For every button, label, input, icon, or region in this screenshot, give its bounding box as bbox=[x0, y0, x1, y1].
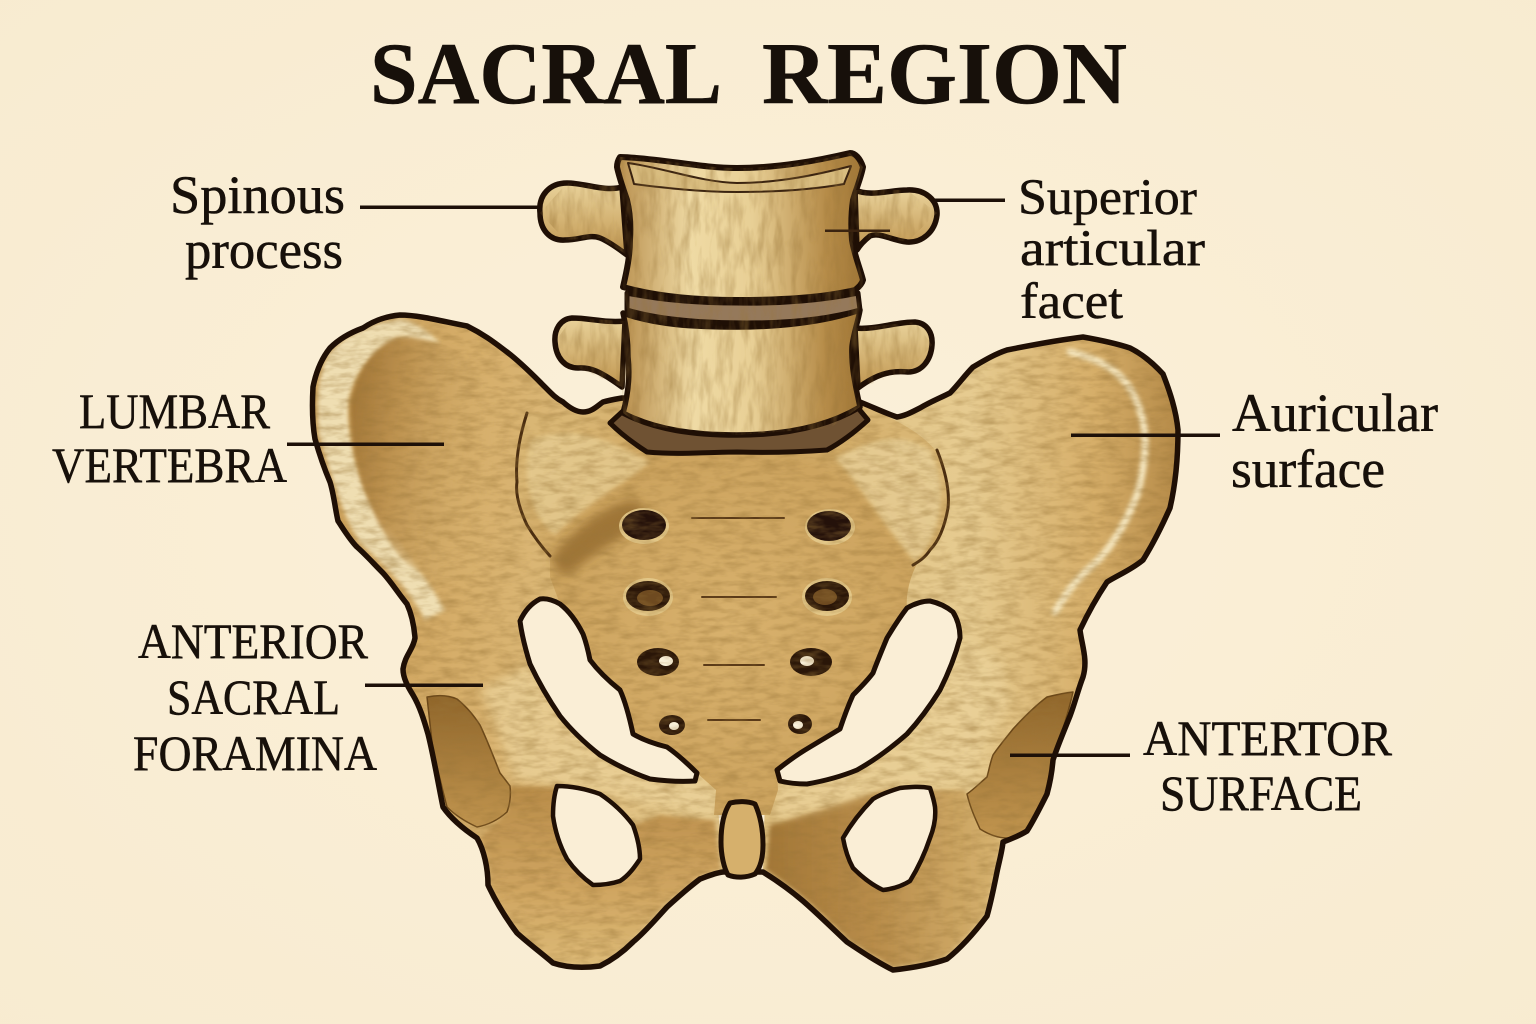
left iliac crest rim bbox=[318, 319, 445, 620]
label: Superior articular facet: facet bbox=[1020, 274, 1123, 330]
title bbox=[370, 26, 1127, 123]
label: Spinous process: Spinous bbox=[170, 165, 345, 225]
left large pelvic opening bbox=[520, 599, 697, 781]
label: Auricular surface bbox=[1071, 383, 1438, 499]
label: Anterior sacral foramina: ANTERIOR bbox=[138, 613, 369, 669]
left iliac fossa bbox=[350, 337, 515, 582]
label: Anterior sacral foramina: FORAMINA bbox=[133, 725, 377, 781]
label: Lumbar vertebra: VERTEBRA bbox=[52, 437, 287, 493]
lower vertebra transverse processes bbox=[555, 318, 932, 388]
right pubic hole bbox=[843, 787, 935, 890]
right large pelvic opening bbox=[777, 601, 960, 784]
right iliac crest highlight bbox=[1055, 352, 1145, 612]
left lower ring bbox=[480, 786, 721, 964]
left wing highlight bbox=[527, 433, 650, 535]
left wing shadow bbox=[552, 500, 646, 574]
label: Lumbar vertebra: LUMBAR bbox=[79, 383, 271, 439]
pelvis outline bbox=[312, 315, 1178, 970]
illustration: pelvis and lumbar vertebrae bbox=[300, 150, 1200, 980]
label: Antertor surface: ANTERTOR bbox=[1143, 710, 1393, 766]
left pubic ramus highlight bbox=[480, 664, 717, 815]
upper lumbar vertebra bbox=[617, 153, 863, 300]
right hip bone bbox=[763, 337, 1178, 970]
label: Superior articular facet: Superior bbox=[1018, 170, 1197, 226]
title: REGION bbox=[762, 26, 1127, 123]
sacral foramina, upper pair bbox=[619, 508, 855, 616]
left ischium bbox=[427, 696, 510, 827]
right wing highlight bbox=[835, 439, 941, 562]
label: Lumbar vertebra bbox=[52, 383, 444, 493]
right lower ring bbox=[766, 790, 1003, 967]
upper vertebra transverse processes bbox=[540, 183, 937, 255]
label: Superior articular facet: articular bbox=[1020, 221, 1205, 277]
label: Spinous process: process bbox=[185, 220, 343, 280]
left pubic hole bbox=[553, 786, 640, 885]
title: SACRAL bbox=[370, 26, 722, 123]
label: Auricular surface: Auricular bbox=[1232, 383, 1438, 443]
vertebra grain texture bbox=[530, 150, 950, 440]
label: Anterior sacral foramina: SACRAL bbox=[167, 669, 340, 725]
pubic symphysis bbox=[721, 802, 763, 877]
right pubic ramus highlight bbox=[775, 640, 1010, 820]
sacral foramina, lower pair bbox=[637, 648, 832, 735]
sacroiliac joint lines bbox=[517, 413, 948, 565]
bone grain texture bbox=[300, 300, 1200, 980]
left hip bone bbox=[312, 315, 723, 967]
label: Superior articular facet bbox=[825, 170, 1205, 330]
sacrum bbox=[517, 398, 948, 815]
lower disc bbox=[610, 408, 868, 453]
label: Anterior sacral foramina bbox=[133, 613, 483, 781]
right ischium bbox=[967, 692, 1073, 838]
label: Spinous process bbox=[170, 165, 540, 280]
intervertebral disc bbox=[627, 293, 860, 323]
label: Antertor surface: SURFACE bbox=[1160, 765, 1362, 821]
vertebra top rim bbox=[628, 163, 851, 192]
label: Antertor surface bbox=[1010, 710, 1393, 821]
label: Auricular surface: surface bbox=[1231, 439, 1385, 499]
sacral ridges bbox=[692, 518, 784, 720]
lower lumbar vertebra bbox=[623, 310, 860, 435]
